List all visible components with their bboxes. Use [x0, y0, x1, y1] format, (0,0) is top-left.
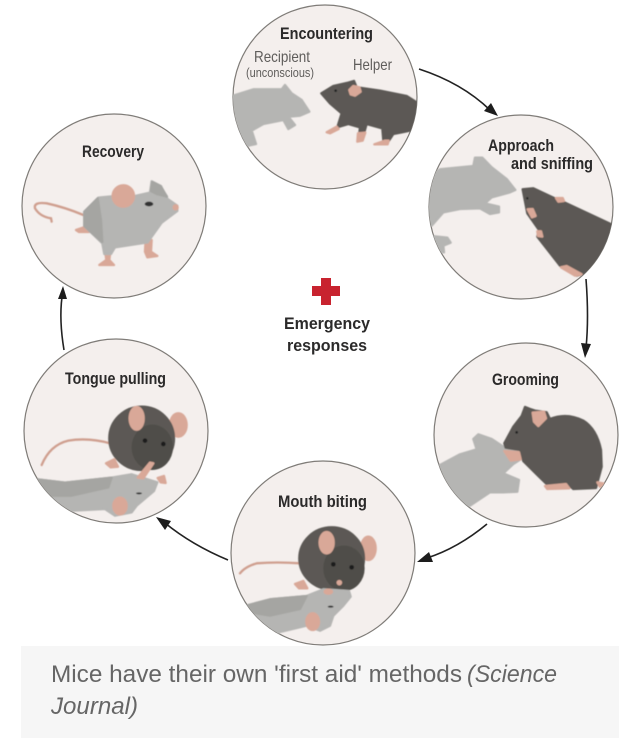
panel: encountering	[230, 5, 418, 189]
panel: tongue pulling	[24, 339, 208, 523]
title: recovery: Recovery	[82, 142, 144, 161]
heading: emergency: Emergency	[284, 314, 370, 333]
title: tongue pulling: Tongue pulling	[65, 369, 166, 388]
panel: approach and sniffing	[428, 115, 615, 299]
illustration: grooming mice	[440, 407, 604, 506]
caption panel	[21, 646, 619, 738]
caption line 1: Mice have their own 'first aid' methods	[51, 661, 462, 688]
arrow: mouth biting to tongue pulling	[156, 517, 228, 560]
illustration: tongue pulling mice	[37, 407, 187, 516]
title: encountering: Encountering	[280, 24, 373, 43]
panel: mouth biting	[231, 461, 415, 650]
arrow: encountering to approach	[419, 69, 498, 116]
illustration: recipient and helper mice	[230, 81, 418, 146]
caption source: (Science	[467, 661, 557, 688]
label: unconscious: (unconscious)	[246, 65, 314, 80]
arrow: grooming to mouth biting	[417, 524, 487, 562]
illustration: approach mice	[428, 158, 615, 276]
label: helper: Helper	[353, 57, 393, 74]
center: emergency responses	[284, 278, 370, 355]
icon: red cross	[312, 278, 340, 305]
title: grooming: Grooming	[492, 370, 559, 389]
panel: grooming	[434, 343, 618, 527]
title: mouth biting: Mouth biting	[278, 492, 367, 511]
illustration: recovering mouse	[35, 181, 178, 265]
arrow: approach to grooming	[581, 279, 591, 358]
label: recipient: Recipient	[254, 49, 310, 66]
heading: responses: responses	[287, 336, 367, 355]
caption line 2: Journal)	[50, 693, 138, 720]
title: and sniffing: and sniffing	[511, 154, 593, 173]
arrow: tongue pulling to recovery	[58, 286, 67, 350]
panel: recovery	[22, 114, 206, 298]
illustration: mouth biting mice	[240, 527, 376, 650]
title: approach: Approach	[488, 136, 554, 155]
